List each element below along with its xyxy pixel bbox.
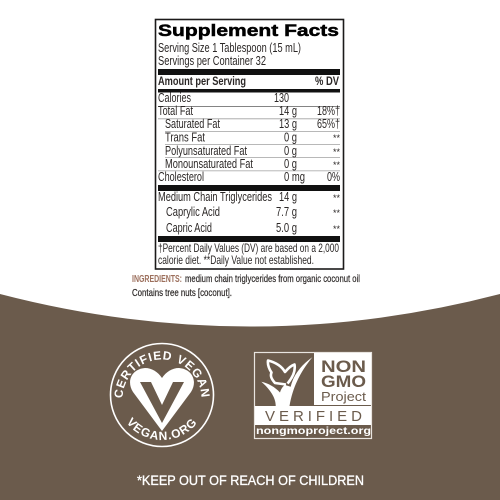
medium chain triglycerides rows: 14 g bbox=[279, 190, 297, 204]
nutrient rows: Trans Fat bbox=[165, 130, 205, 144]
ingredients text: Contains tree nuts [coconut]. bbox=[132, 287, 232, 299]
nutrient rows: Total Fat bbox=[158, 104, 193, 118]
medium chain triglycerides rows: 5.0 g bbox=[276, 221, 297, 235]
non gmo wordmark: Project bbox=[321, 390, 367, 404]
nutrient rows: 0 g bbox=[284, 130, 297, 144]
nutrient rows: Calories bbox=[158, 91, 191, 105]
non gmo wordmark: GMO bbox=[321, 372, 366, 391]
serving information: Servings per Container 32 bbox=[158, 54, 266, 68]
ingredients text: INGREDIENTS: bbox=[132, 273, 182, 285]
footnote: calorie diet. **Daily Value not established. bbox=[158, 253, 314, 267]
footnote: †Percent Daily Values (DV) are based on a 2,000 bbox=[158, 241, 339, 255]
nutrient rows: 0% bbox=[327, 170, 340, 184]
footnote bbox=[158, 241, 339, 267]
ingredients text bbox=[132, 273, 360, 299]
medium chain triglycerides rows: ** bbox=[333, 193, 341, 203]
non gmo wordmark bbox=[256, 357, 371, 437]
medium chain triglycerides rows: ** bbox=[333, 208, 341, 218]
nutrient rows: 65%† bbox=[317, 117, 340, 131]
nutrient rows: 18%† bbox=[317, 104, 340, 118]
medium chain triglycerides rows: Capric Acid bbox=[166, 221, 212, 235]
nutrient rows: ** bbox=[333, 147, 341, 157]
nutrient rows: 0 g bbox=[284, 157, 297, 171]
ingredients text: medium chain triglycerides from organic coconut oil bbox=[185, 273, 360, 285]
nutrient rows: Monounsaturated Fat bbox=[165, 157, 253, 171]
butterfly and grass mark bbox=[261, 357, 312, 406]
non gmo wordmark: nongmoproject.org bbox=[256, 425, 371, 437]
nutrient rows: 13 g bbox=[279, 117, 297, 131]
nutrient rows bbox=[158, 91, 341, 184]
amount per serving header: % DV bbox=[315, 76, 339, 88]
non gmo wordmark: VERIFIED bbox=[265, 408, 362, 425]
warning text: *KEEP OUT OF REACH OF CHILDREN bbox=[137, 473, 364, 488]
heading: supplement facts: Supplement Facts bbox=[158, 21, 339, 40]
medium chain triglycerides rows: Caprylic Acid bbox=[166, 205, 220, 219]
nutrient rows: Saturated Fat bbox=[165, 117, 220, 131]
medium chain triglycerides rows bbox=[158, 190, 341, 235]
serving information: Serving Size 1 Tablespoon (15 mL) bbox=[158, 41, 301, 55]
nutrient rows: ** bbox=[333, 133, 341, 143]
nutrient rows: ** bbox=[333, 160, 341, 170]
heart with V bbox=[130, 368, 194, 431]
nutrient rows: 14 g bbox=[279, 104, 297, 118]
icon: certified vegan badge: VEGAN.ORG bbox=[128, 416, 196, 440]
medium chain triglycerides rows: Medium Chain Triglycerides bbox=[158, 190, 272, 204]
serving information bbox=[158, 41, 301, 68]
nutrient rows: 130 bbox=[274, 91, 289, 105]
nutrient rows: Polyunsaturated Fat bbox=[165, 144, 247, 158]
non gmo wordmark: NON bbox=[321, 357, 366, 376]
amount per serving header bbox=[158, 76, 339, 88]
nutrient rows: 0 mg bbox=[284, 170, 305, 184]
icon: certified vegan badge: CERTIFIED VEGAN bbox=[114, 351, 210, 398]
nutrient rows: Cholesterol bbox=[158, 170, 204, 184]
supplement facts panel bbox=[156, 20, 344, 269]
medium chain triglycerides rows: ** bbox=[333, 224, 341, 234]
icon: certified vegan badge bbox=[110, 342, 214, 448]
amount per serving header: Amount per Serving bbox=[158, 76, 246, 88]
brown background panel bbox=[0, 294, 500, 500]
medium chain triglycerides rows: 7.7 g bbox=[276, 205, 297, 219]
nutrient rows: 0 g bbox=[284, 144, 297, 158]
icon: non gmo project verified badge bbox=[254, 352, 372, 438]
